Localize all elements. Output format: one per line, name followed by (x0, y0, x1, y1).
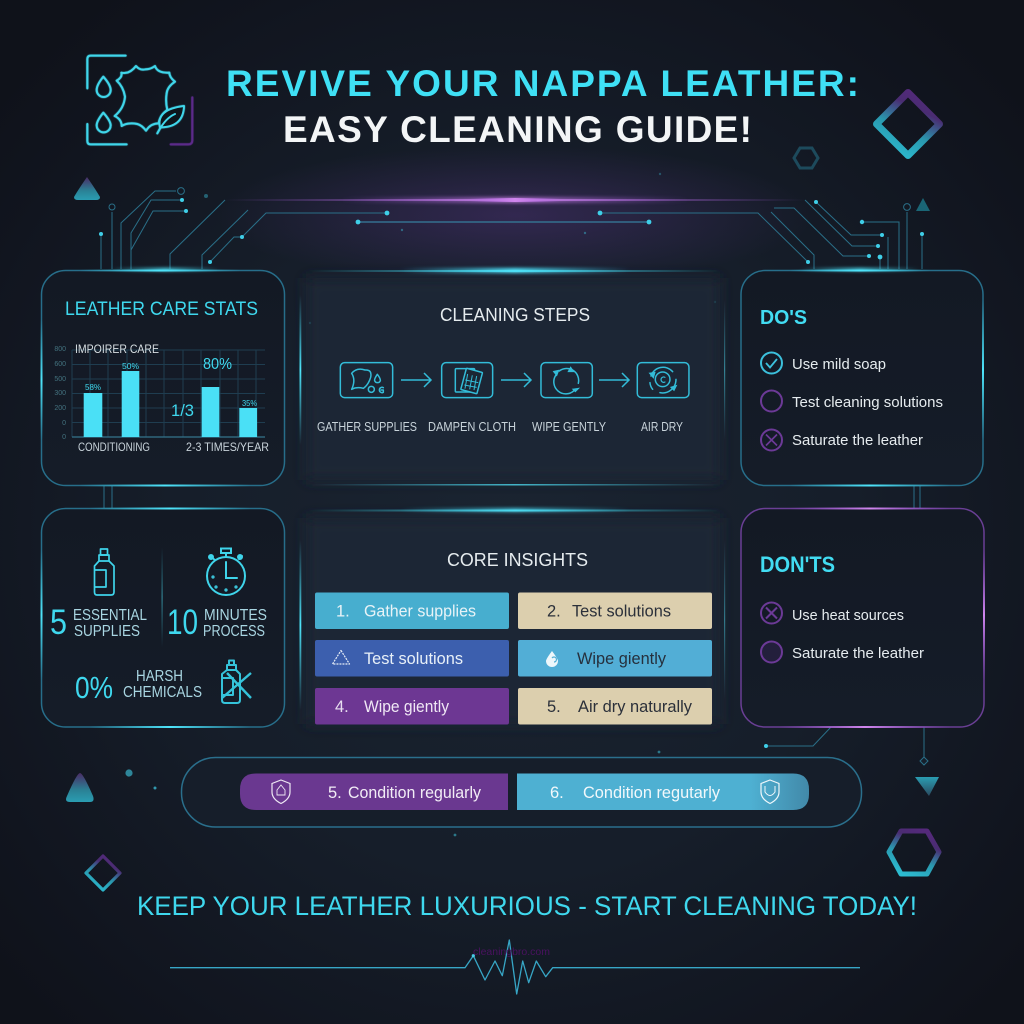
insight: air dry naturally: 5. (547, 698, 561, 716)
banner: condition regularly purple: Condition regularly (348, 784, 482, 802)
step icon: gather supplies (340, 363, 393, 398)
banner: condition regularly blue: Condition regutarly (583, 784, 721, 802)
purple haze (215, 145, 815, 285)
icon: stopwatch (207, 548, 245, 595)
arrow (401, 373, 431, 387)
stat: 0% harsh chemicals: CHEMICALS (123, 684, 202, 701)
stat: 0% harsh chemicals: HARSH (136, 668, 183, 685)
purple light beam (225, 197, 805, 203)
insight: test solutions tan (518, 592, 712, 629)
panel: cleaning steps (300, 268, 725, 486)
stat: 5 essential supplies (50, 603, 147, 642)
heading: do's: DO'S (760, 307, 807, 329)
stat: 5 essential supplies: ESSENTIAL (73, 607, 147, 624)
insight: test solutions tan: 2. (547, 602, 561, 620)
decorative shape: triangle top left (74, 177, 100, 200)
heading: leather care stats: LEATHER CARE STATS (65, 298, 258, 320)
arrow (599, 373, 629, 387)
insight: wipe gently blue (518, 640, 712, 676)
bar chart: 1/3 (171, 402, 194, 420)
arrow (501, 373, 531, 387)
panel: leather care stats (40, 270, 284, 486)
cyan glow over panel tops (110, 268, 920, 271)
insight: wipe gently purple (315, 688, 509, 724)
bar chart: 58% (85, 382, 101, 392)
bar chart: 2-3 TIMES/YEAR (186, 440, 269, 454)
insight: air dry naturally: Air dry naturally (578, 698, 693, 716)
step labels: GATHER SUPPLIES (317, 420, 417, 434)
list item: saturate the leather (761, 642, 924, 662)
step labels: DAMPEN CLOTH (428, 420, 516, 434)
stat: 5 essential supplies: 5 (50, 603, 67, 642)
bar chart: 200 (54, 405, 66, 412)
header icon: leather hide with drops and leaf (87, 56, 192, 144)
banner: condition regularly purple (240, 774, 508, 810)
bar chart: 35% (242, 398, 257, 408)
step labels: WIPE GENTLY (532, 420, 607, 434)
list item: saturate the leather: Saturate the leather (792, 645, 924, 662)
bar chart: 0 (62, 434, 66, 441)
stat: 10 minutes process: 10 (167, 603, 198, 642)
icon: bottle (94, 549, 114, 595)
bar chart: IMPOIRER CARE (75, 344, 159, 356)
banner: condition regularly purple: 5. (328, 784, 342, 802)
list item: use mild soap: Use mild soap (792, 356, 886, 373)
insight: wipe gently purple: Wipe giently (364, 698, 450, 716)
list item: use heat sources (761, 602, 904, 624)
banner: condition regularly blue (517, 774, 809, 810)
list item: test cleaning solutions (761, 390, 943, 412)
insight: air dry naturally (518, 688, 712, 724)
heading: cleaning steps: CLEANING STEPS (440, 305, 590, 325)
decorative shape: large diamond (876, 92, 940, 156)
list item: saturate the leather: Saturate the leather (792, 432, 923, 449)
divider (162, 547, 163, 647)
icon: no chemical spray (222, 660, 251, 703)
insight: gather supplies: Gather supplies (364, 602, 476, 620)
stat: 5 essential supplies: SUPPLIES (74, 623, 140, 640)
insight: wipe gently blue: Wipe giently (577, 650, 667, 668)
decorative shape: diamond bottom left (86, 856, 120, 890)
list item: use mild soap (761, 352, 886, 374)
step icon: air dry (637, 363, 689, 398)
stat: 0% harsh chemicals (75, 668, 202, 705)
insight: test solutions tan: Test solutions (572, 602, 671, 620)
panel: do's (741, 270, 984, 486)
panel: don'ts (741, 508, 985, 728)
stat: 10 minutes process: MINUTES (204, 607, 267, 624)
step labels (317, 420, 684, 434)
list item: test cleaning solutions: Test cleaning solutions (792, 394, 943, 411)
bar chart: 0 (62, 420, 66, 427)
bar chart: CONDITIONING (78, 440, 150, 454)
insight: test solutions blue: Test solutions (364, 650, 463, 668)
panel: condition regularly pill (182, 758, 862, 827)
stat: 10 minutes process: PROCESS (203, 623, 265, 640)
title (226, 63, 859, 150)
bar chart: 500 (54, 376, 66, 383)
heartbeat line (170, 940, 860, 994)
stat: 10 minutes process (167, 603, 267, 642)
list item: use heat sources: Use heat sources (792, 607, 904, 624)
stat: 0% harsh chemicals: 0% (75, 670, 113, 705)
banner: condition regularly blue: 6. (550, 784, 564, 802)
bar chart: 600 (54, 361, 66, 368)
insight: gather supplies: 1. (336, 602, 350, 620)
insight: test solutions blue (315, 640, 509, 676)
panel: core insights (300, 508, 725, 724)
title: EASY CLEANING GUIDE! (283, 109, 752, 150)
decorative shape: triangle bottom left (66, 773, 94, 802)
list item: saturate the leather (761, 430, 923, 450)
title: REVIVE YOUR NAPPA LEATHER: (226, 63, 859, 104)
decorative shape: small hexagon (794, 148, 818, 168)
footer call to action: KEEP YOUR LEATHER LUXURIOUS - START CLEANING TODAY! (137, 891, 917, 921)
heading: core insights: CORE INSIGHTS (447, 550, 588, 570)
decorative shape: hexagon bottom right (889, 831, 939, 874)
step icon: wipe gently (541, 363, 592, 398)
insight: wipe gently purple: 4. (335, 698, 349, 716)
bar chart: 80% (203, 356, 232, 373)
circuit traces and particles (101, 188, 928, 765)
bar chart: 50% (122, 361, 139, 371)
panel: key numbers (40, 508, 284, 728)
step icon: dampen cloth (442, 363, 493, 398)
bar chart: 800 (54, 346, 66, 353)
watermark: cleaningbro.com (473, 947, 550, 958)
heading: don'ts: DON'TS (760, 552, 835, 577)
bar chart: 300 (54, 390, 66, 397)
decorative shape: triangle top right (916, 198, 930, 211)
decorative shape: triangle bottom right (915, 777, 939, 796)
insight: gather supplies (315, 592, 509, 629)
bar chart (54, 344, 269, 454)
step labels: AIR DRY (641, 420, 684, 434)
